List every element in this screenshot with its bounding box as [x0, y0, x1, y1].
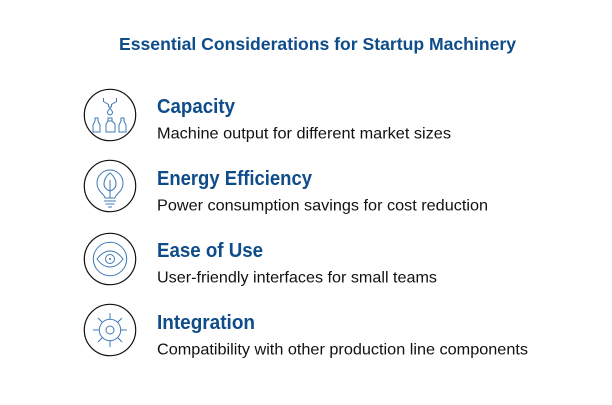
description: integration: Compatibility with other production line components: [157, 342, 528, 358]
heading: capacity: Capacity: [157, 96, 236, 118]
heading: integration: Integration: [157, 312, 255, 334]
description: ease of use: User-friendly interfaces for small teams: [157, 270, 437, 286]
icon: gear with rays: [84, 304, 136, 356]
title: Essential Considerations for Startup Machinery: [119, 34, 516, 54]
heading: ease of use: Ease of Use: [157, 240, 263, 262]
heading: energy efficiency: Energy Efficiency: [157, 168, 313, 190]
icon: nozzle and bottles: [84, 89, 136, 141]
icon: eye: [84, 233, 136, 285]
item: ease of use: [84, 233, 437, 286]
item: energy efficiency: [84, 160, 488, 214]
item: capacity: [84, 89, 451, 142]
item: integration: [84, 304, 528, 358]
icon: leaf in light bulb: [84, 160, 136, 212]
description: energy efficiency: Power consumption savings for cost reduction: [157, 198, 488, 214]
description: capacity: Machine output for different market sizes: [157, 126, 451, 142]
